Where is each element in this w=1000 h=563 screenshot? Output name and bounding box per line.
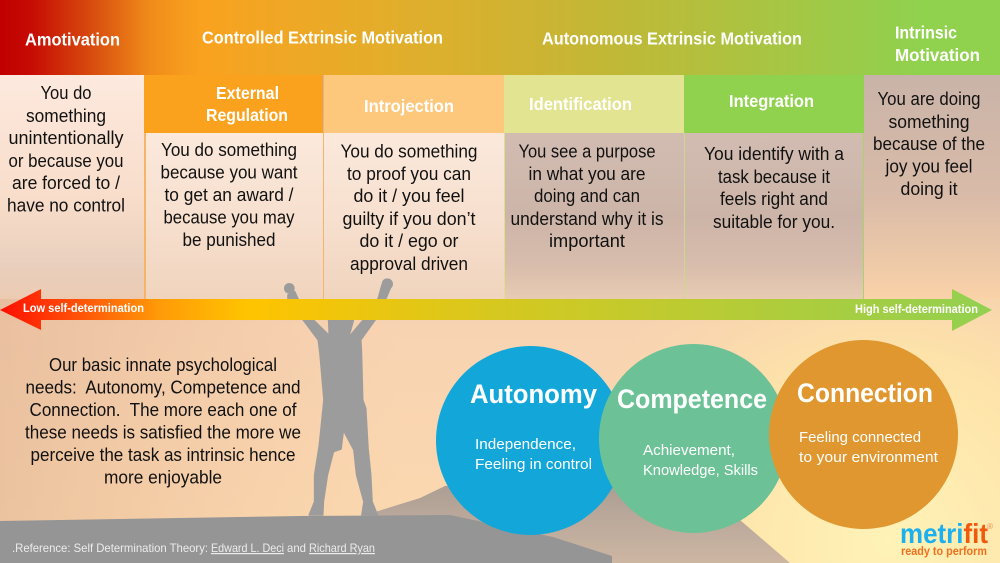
- amotivation description: unintentionally: [8, 128, 124, 148]
- identification description: in what you are: [528, 164, 646, 184]
- introjection description: [340, 142, 478, 274]
- header: external regulation: External: [216, 83, 279, 103]
- reference line: and: [287, 541, 306, 555]
- column: integration: [684, 75, 864, 299]
- column: intrinsic description: You are doing: [878, 89, 980, 109]
- column: intrinsic description: something: [888, 112, 970, 132]
- introjection description: do it / you feel: [354, 186, 464, 206]
- circle: autonomy: [436, 346, 625, 535]
- introjection description: approval driven: [350, 254, 468, 274]
- header: introjection: [324, 75, 504, 133]
- label: amotivation: Amotivation: [25, 30, 120, 50]
- label: high self-determination: High self-determination: [855, 304, 978, 316]
- circle: autonomy: Feeling in control: [475, 456, 592, 473]
- label: intrinsic motivation: Intrinsic: [895, 22, 957, 42]
- top band with motivation categories: [0, 0, 1000, 75]
- column: amotivation body: [0, 75, 144, 299]
- circle: connection: Connection: [797, 378, 933, 408]
- integration description: [704, 144, 845, 232]
- header: external regulation: [144, 75, 323, 133]
- label: intrinsic motivation: Motivation: [895, 45, 980, 65]
- circle: autonomy: Autonomy: [470, 379, 597, 409]
- amotivation description: something: [26, 106, 106, 126]
- identification description: understand why it is: [510, 209, 664, 229]
- identification description: important: [549, 231, 625, 251]
- integration description: You identify with a: [704, 144, 845, 164]
- ground: [0, 515, 612, 563]
- label: autonomous extrinsic motivation: Autonomous Extrinsic Motivation: [542, 28, 802, 48]
- external regulation description: [160, 140, 298, 250]
- introjection description: do it / ego or: [360, 231, 458, 251]
- reference line: Richard Ryan: [309, 541, 375, 555]
- distant mountain: [375, 478, 790, 563]
- column: external regulation: [144, 75, 323, 299]
- external regulation description: because you want: [160, 162, 298, 182]
- header: identification: Identification: [529, 94, 632, 114]
- column: intrinsic description: doing it: [900, 179, 958, 199]
- amotivation description: You do: [40, 83, 92, 103]
- external regulation description: because you may: [164, 208, 294, 228]
- circle: autonomy: Independence,: [475, 436, 576, 453]
- identification description: [510, 142, 664, 251]
- arrow: self-determination scale: [0, 289, 992, 331]
- label: low self-determination: Low self-determination: [23, 303, 144, 315]
- reference line: .Reference: Self Determination Theory:: [12, 541, 208, 555]
- column: introjection: [323, 75, 504, 299]
- text block: basic psychological needs: Connection. The more each one of: [30, 400, 297, 420]
- logo: metrifit: ready to perform: [901, 544, 987, 558]
- reference line: [12, 541, 375, 555]
- header: introjection: Introjection: [364, 96, 454, 116]
- column: intrinsic description: joy you feel: [885, 156, 972, 176]
- label: intrinsic motivation: [895, 22, 980, 65]
- logo: metrifit: metrifit: [900, 518, 988, 549]
- introjection description: guilty if you don’t: [342, 209, 476, 229]
- circle: connection: Feeling connected: [799, 429, 921, 446]
- amotivation description: [7, 83, 125, 216]
- integration description: feels right and: [720, 189, 828, 209]
- circle: connection: to your environment: [799, 449, 939, 466]
- reference line: Edward L. Deci: [211, 541, 284, 555]
- external regulation description: be punished: [182, 230, 276, 250]
- identification description: You see a purpose: [518, 142, 656, 162]
- header: identification: [504, 75, 684, 133]
- text block: basic psychological needs: more enjoyable: [104, 468, 222, 488]
- label: controlled extrinsic motivation: Controlled Extrinsic Motivation: [202, 28, 443, 48]
- header: external regulation: Regulation: [206, 105, 288, 125]
- text block: basic psychological needs: [25, 355, 301, 488]
- header: integration: [684, 75, 864, 133]
- identification description: doing and can: [534, 186, 640, 206]
- column: intrinsic description: because of the: [873, 134, 985, 154]
- column: identification: [504, 75, 684, 299]
- circle: competence: Knowledge, Skills: [643, 462, 758, 479]
- text block: basic psychological needs: perceive the task as intrinsic hence: [30, 445, 296, 465]
- column: intrinsic description: [864, 75, 1000, 299]
- amotivation description: are forced to /: [12, 173, 120, 193]
- silhouette: person with raised arms: [284, 278, 393, 515]
- circle: competence: Achievement,: [643, 442, 735, 459]
- introjection description: to proof you can: [347, 164, 471, 184]
- circle: connection: [769, 340, 958, 529]
- integration description: task because it: [718, 167, 830, 187]
- external regulation description: You do something: [161, 140, 297, 160]
- text block: basic psychological needs: these needs is satisfied the more we: [25, 422, 301, 442]
- external regulation description: to get an award /: [164, 185, 294, 205]
- amotivation description: or because you: [8, 151, 124, 171]
- circle: competence: Competence: [617, 384, 767, 414]
- text block: basic psychological needs: needs: Autonomy, Competence and: [26, 378, 300, 398]
- circle: competence: [599, 344, 788, 533]
- integration description: suitable for you.: [713, 212, 835, 232]
- header: integration: Integration: [729, 91, 814, 111]
- introjection description: You do something: [340, 142, 478, 162]
- amotivation description: have no control: [7, 196, 125, 216]
- logo: metrifit: ®: [987, 522, 993, 531]
- text block: basic psychological needs: Our basic innate psychological: [49, 355, 277, 375]
